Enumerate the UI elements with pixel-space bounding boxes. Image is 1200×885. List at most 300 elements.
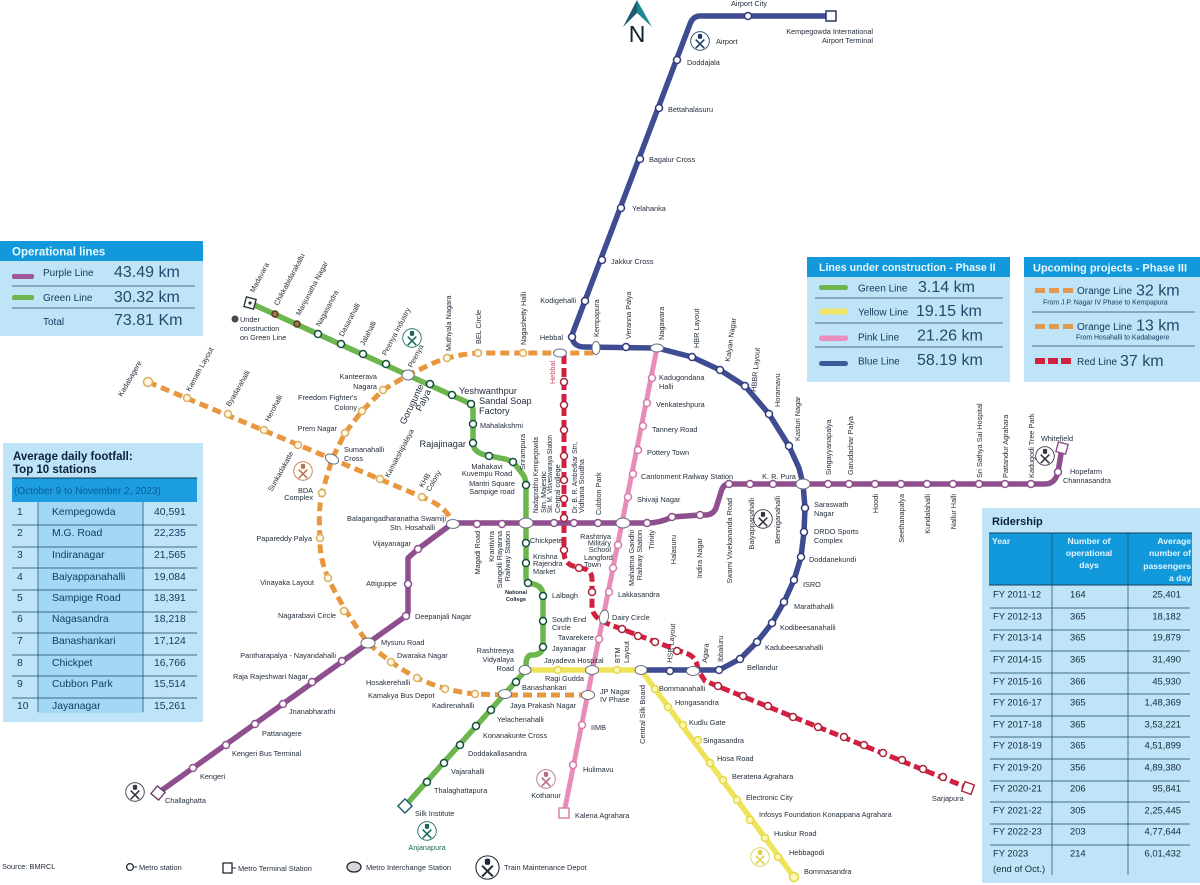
labels: blue line: Nagawara <box>657 306 666 340</box>
row: green line <box>12 289 180 306</box>
labels: blue line: Kodibeesanahalli <box>780 623 836 632</box>
labels: blue line: Doddanekundi <box>809 555 856 564</box>
row: blue line: 58.19 km <box>917 352 983 369</box>
labels: purple line: Halasuru <box>669 535 678 564</box>
line: purple <box>158 448 1062 793</box>
labels: blue line: Veranna Palya <box>624 291 633 339</box>
line: yellow <box>525 670 794 877</box>
labels: orange lines: Kamath Layout <box>184 346 216 393</box>
labels: blue line: ISRO <box>803 580 821 589</box>
labels: orange lines: Colony <box>334 403 357 412</box>
legend: train maintenance depot <box>476 856 587 879</box>
labels: pink line: JP Nagar <box>600 687 631 696</box>
labels: blue line: Saraswath <box>814 500 848 509</box>
labels: purple line: Stn. Hosahalli <box>390 523 435 532</box>
labels: blue line: Kempegowda International <box>786 27 873 36</box>
labels: pink line: Kothanur <box>531 791 561 800</box>
table: ridership by year: 366 <box>1070 676 1086 686</box>
labels: orange lines: Kadirenahalli <box>432 701 475 710</box>
row: green line: Green Line <box>43 293 93 304</box>
labels: yellow line <box>545 641 893 876</box>
table: ridership by year: 19,879 <box>1152 632 1181 642</box>
labels: purple line: Deepanjali Nagar <box>415 612 472 621</box>
labels: pink line: Town <box>584 560 601 569</box>
legend <box>127 856 587 879</box>
depot icon: Kothanur <box>537 770 555 788</box>
row: orange line 13 km: 13 km <box>1136 318 1180 334</box>
table: ridership by year: FY 2020-21 <box>993 782 1042 794</box>
table: top 10 stations: 15,261 <box>154 701 186 712</box>
stations: purple line <box>190 468 1062 772</box>
labels: yellow line: Central Silk Board <box>638 685 647 744</box>
labels: pink line: Pottery Town <box>647 448 689 457</box>
table: top 10 stations: Nagasandra <box>52 614 109 625</box>
labels: green line: Rajajinagar <box>420 439 466 449</box>
labels: purple line: Magadi Road <box>473 531 482 574</box>
labels: orange lines: Byadarahalli <box>224 368 252 408</box>
depot icon: Challaghatta <box>126 783 144 801</box>
table: ridership by year: 3,53,221 <box>1144 718 1181 730</box>
labels: blue line: K. R. Pura <box>762 472 797 481</box>
labels: red line: Hebbal <box>548 360 557 384</box>
labels: orange lines: Cross <box>344 454 363 463</box>
labels: green line: Madavara <box>248 260 271 294</box>
labels: green line: Vajarahalli <box>451 767 485 776</box>
labels: pink line: Cantonment Railway Station <box>641 472 733 481</box>
labels: purple line: Kengeri Bus Terminal <box>232 749 302 758</box>
labels: pink line: School <box>589 545 611 554</box>
labels: green line: Circle <box>552 623 571 632</box>
labels: pink line: Langford <box>584 553 613 562</box>
labels: green line: Sandal Soap <box>479 396 532 406</box>
labels: pink line: Kadugondana <box>659 373 705 382</box>
labels: blue line: Kalyan Nagar <box>723 317 738 362</box>
depot icon: BDA Complex <box>294 462 312 480</box>
labels: yellow line: Electronic City <box>746 793 793 802</box>
labels: green line: Market <box>533 567 555 576</box>
labels: orange lines: KHB <box>417 471 432 489</box>
table: top 10 stations: Banashankari <box>52 636 116 647</box>
table: top 10 stations: 8 <box>17 658 23 669</box>
note: under construction on green line: on Green Line <box>240 333 286 342</box>
table header: Year <box>992 536 1011 546</box>
row: purple line: 43.49 km <box>114 264 180 281</box>
row: pink line: 21.26 km <box>917 328 983 344</box>
labels: purple line: Railway Station <box>503 531 512 581</box>
table: ridership by year: 164 <box>1070 588 1086 600</box>
labels: purple line: Balagangadharanatha Swamiji <box>347 514 446 523</box>
labels: blue line: Bettahalasuru <box>668 105 713 114</box>
table header: a day <box>1169 573 1191 583</box>
labels: green line: Factory <box>479 406 510 416</box>
table: ridership by year: 365 <box>1070 696 1086 708</box>
labels: pink line: IIMB <box>591 723 606 732</box>
labels: purple line: Raja Rajeshwari Nagar <box>233 672 309 681</box>
north arrow: N <box>629 21 645 47</box>
labels: blue line: Kadubeesanahalli <box>765 643 823 652</box>
source note: Source: BMRCL <box>2 862 55 871</box>
labels: orange lines: Herohalli <box>263 393 284 423</box>
labels: blue line: Marathahalli <box>794 602 834 611</box>
depot icon: Airport <box>691 32 709 50</box>
panel: average daily footfall <box>3 443 203 722</box>
stations: blue line <box>568 12 808 674</box>
labels: pink line: Hulimavu <box>583 765 613 774</box>
labels: blue line <box>540 0 873 672</box>
labels: yellow line: Bommanahalli <box>659 684 706 693</box>
labels: purple line: Indira Nagar <box>695 537 704 578</box>
table: top 10 stations: 19,084 <box>154 572 186 583</box>
row: yellow line: 19.15 km <box>916 303 982 320</box>
depot icon: Whitefield <box>1036 447 1054 465</box>
heading: footfall title <box>13 451 133 476</box>
labels: green line: Sampige road <box>469 487 515 496</box>
panel: ridership <box>982 508 1200 883</box>
labels: green line: Jalahalli <box>358 319 378 347</box>
line: pink <box>564 348 657 813</box>
labels: blue line: Agara <box>700 642 711 663</box>
stations: orange lines <box>144 350 526 698</box>
table: ridership by year: FY 2014-15 <box>993 654 1042 664</box>
legend: train maintenance depot: Train Maintenance Depot <box>504 863 587 872</box>
table: top 10 stations: 5 <box>17 593 23 604</box>
stations: pink line <box>570 374 656 768</box>
labels: blue line: Yelahanka <box>632 204 667 213</box>
labels: orange lines: Sumanahalli <box>344 445 385 454</box>
labels: green line: Silk Institute <box>415 809 454 818</box>
labels: purple line <box>165 403 1112 805</box>
panel: operational lines <box>0 241 203 336</box>
labels: green line: Peenya <box>406 342 426 369</box>
labels: orange lines: Papareddy Palya <box>256 534 313 543</box>
labels: blue line: Airport <box>716 37 738 46</box>
labels: purple line: Railway Station <box>635 530 644 580</box>
table: top 10 stations: 3 <box>17 550 23 561</box>
table: top 10 stations: Chickpet <box>52 658 93 669</box>
row: purple line <box>12 264 180 281</box>
labels: pink line: Kalena Agrahara <box>575 811 630 820</box>
labels: pink line: Venkateshpura <box>656 400 706 409</box>
labels: pink line: Tavarekere <box>558 633 594 642</box>
table: ridership by year: 365 <box>1070 610 1086 622</box>
row: orange line 32 km: From J.P. Nagar IV Phase to Kempapura <box>1043 300 1168 306</box>
north arrow <box>623 0 652 47</box>
table: top 10 stations: 4 <box>17 572 23 583</box>
labels: green line: Yelachenahalli <box>497 715 544 724</box>
labels: blue line: HBBR Layout <box>749 347 762 392</box>
labels: yellow line: Infosys Foundation Konappana Agrahara <box>759 810 893 819</box>
row: green line: 30.32 km <box>114 289 180 306</box>
labels: green line: Palya <box>414 387 433 413</box>
labels: purple line: Hoodi <box>871 494 880 513</box>
row: orange line 13 km: Orange Line <box>1077 322 1132 333</box>
line: green <box>250 303 543 806</box>
labels: orange lines: Dwaraka Nagar <box>397 651 448 660</box>
table shading <box>38 502 143 713</box>
stations: green line <box>314 330 546 786</box>
table: ridership by year: FY 2013-14 <box>993 632 1042 642</box>
labels: blue line: Kodigehalli <box>540 296 576 305</box>
table header: passengers <box>1143 561 1191 571</box>
labels: purple line: Central college <box>553 464 562 513</box>
row: green line: Green Line <box>858 284 908 294</box>
table: ridership by year: 365 <box>1070 718 1086 730</box>
labels: orange lines: Kamakya Bus Depot <box>368 691 435 700</box>
row: orange line 32 km: Orange Line <box>1077 286 1132 297</box>
terminal stations <box>151 11 1068 818</box>
stations: red line <box>560 378 946 780</box>
labels: purple line: Baiyappanahalli <box>747 498 756 550</box>
labels: pink line: Rashtriya <box>580 532 612 541</box>
labels: green line: Krishna <box>533 552 559 561</box>
labels: purple line: Dr. B. R. Ambedkar Stn, <box>570 442 579 513</box>
labels: purple line: Stn. Majestic <box>539 471 548 513</box>
labels: orange lines: Nagashetty Halli <box>519 291 528 345</box>
labels: purple line: Vidhana Soudha <box>577 458 586 513</box>
table: ridership by year: 365 <box>1070 632 1086 642</box>
depot icon: Hebbagodi <box>751 848 769 866</box>
row: green line: 3.14 km <box>918 279 975 296</box>
labels: purple line: Kadugodi Tree Park <box>1027 413 1036 478</box>
labels: green line: South End <box>552 615 586 624</box>
labels: green line: Manjunatha Nagar <box>294 259 330 317</box>
labels: pink line: Tannery Road <box>652 425 697 434</box>
labels: orange lines: Freedom Fighter's <box>298 393 357 402</box>
labels: purple line: Kengeri <box>200 772 226 781</box>
table: top 10 stations: 2 <box>17 528 23 539</box>
row: total <box>43 312 182 329</box>
table header <box>989 533 1192 585</box>
labels: purple line: Kundalahalli <box>923 494 932 534</box>
table: ridership by year: 203 <box>1070 826 1086 836</box>
row: pink line: Pink Line <box>858 332 900 344</box>
date range band <box>12 478 197 502</box>
labels: green line: Banashankari <box>522 683 567 692</box>
table: ridership by year: (end of Oct.) <box>993 863 1045 874</box>
depot icon: Anjanapura <box>418 822 436 840</box>
labels: yellow line: Hebbagodi <box>789 848 825 857</box>
labels: orange lines: Muthyala Nagara <box>444 294 453 351</box>
labels: purple line: Pattanagere <box>262 729 302 738</box>
row: red line <box>1035 353 1164 370</box>
row: total: Total <box>43 317 64 328</box>
labels: green line: Srirampura <box>518 433 527 470</box>
labels: orange lines: Colony <box>424 469 443 493</box>
labels: purple line: Mysuru Road <box>381 638 424 647</box>
table: ridership by year: 206 <box>1070 782 1086 794</box>
labels: green line: Mahalakshmi <box>480 421 523 430</box>
table: ridership by year: FY 2017-18 <box>993 718 1042 730</box>
row: red line: 37 km <box>1120 353 1164 370</box>
labels: purple line: Jnanabharathi <box>289 707 336 716</box>
labels: green line: Thalaghattapura <box>434 786 488 795</box>
legend: metro station: Metro station <box>139 863 182 872</box>
table: ridership by year: 95,841 <box>1152 782 1181 794</box>
row: pink line <box>819 328 983 344</box>
labels: purple line: Sri Sathya Sai Hospital <box>975 403 984 478</box>
labels: blue line: Jakkur Cross <box>611 257 654 266</box>
table: ridership by year: 45,930 <box>1152 676 1181 686</box>
labels: purple line: Mahatma Gandhi <box>627 530 636 586</box>
table: ridership by year: FY 2011-12 <box>993 588 1041 600</box>
table: ridership by year: FY 2019-20 <box>993 762 1042 772</box>
labels: orange lines: Nagarabavi Circle <box>278 611 336 620</box>
labels: purple line: Krantivira <box>487 530 496 562</box>
labels: orange lines: Nagara <box>353 382 378 391</box>
table: ridership by year: 6,01,432 <box>1144 848 1181 858</box>
table: top 10 stations: 7 <box>17 636 23 647</box>
table: ridership by year: 2,25,445 <box>1144 804 1181 816</box>
labels: yellow line: Kudlu Gate <box>689 718 726 727</box>
row: blue line <box>819 352 983 369</box>
table: top 10 stations: 22,235 <box>154 528 186 539</box>
labels: blue line: DRDO Sports <box>814 527 859 536</box>
labels: purple line: Cubbon Park <box>594 472 603 515</box>
labels: orange lines: Kadabagere <box>116 359 144 398</box>
depot icon: Peenya <box>403 329 421 347</box>
row: total: 73.81 Km <box>114 312 182 329</box>
stations: yellow line <box>554 666 798 882</box>
stations: green line under construction <box>272 311 300 327</box>
row: red line: Red Line <box>1077 357 1117 368</box>
labels: green line: Peenya Industry <box>380 306 413 357</box>
labels: yellow line: Ragi Gudda <box>545 674 585 683</box>
table: ridership by year: 365 <box>1070 740 1086 750</box>
labels: pink line: Halli <box>659 382 674 391</box>
line: red (dashed) <box>564 355 968 788</box>
labels: orange lines: Complex <box>284 493 313 502</box>
labels: green line: Kuvempu Road <box>462 469 512 478</box>
labels: orange lines: BDA <box>298 486 313 495</box>
labels: purple line: Pantharapalya - Nayandahalli <box>240 651 336 660</box>
labels: pink line: Lakkasandra <box>618 590 661 599</box>
labels: green line: Konanakunte Cross <box>483 731 547 740</box>
table: top 10 stations: 18,218 <box>154 614 186 625</box>
labels: orange lines: Vinayaka Layout <box>260 578 314 587</box>
labels: pink line: Dairy Circle <box>612 613 650 622</box>
table: ridership by year: 18,182 <box>1152 610 1181 622</box>
table: top 10 stations: 6 <box>17 614 23 625</box>
table header: number of <box>1149 548 1191 558</box>
table: ridership by year: FY 2021-22 <box>993 804 1042 816</box>
table: top 10 stations: 1 <box>17 507 23 518</box>
heading: ridership: Ridership <box>992 516 1043 528</box>
note: under construction on green line: construction <box>240 324 279 333</box>
labels: purple line: Pattandur Agrahara <box>1001 414 1010 478</box>
table: top 10 stations: 10 <box>17 701 29 712</box>
labels: orange lines: Hosakerehalli <box>366 678 411 687</box>
labels: orange lines: BEL Circle <box>474 310 483 344</box>
labels: green line: College <box>506 597 526 603</box>
heading: footfall title: Top 10 stations <box>13 464 96 476</box>
table header: Average <box>1157 536 1191 546</box>
table: ridership by year: 365 <box>1070 654 1086 664</box>
labels: blue line: Complex <box>814 536 843 545</box>
row: orange line 32 km: 32 km <box>1136 282 1180 300</box>
labels: green line: Chickpete <box>530 536 562 545</box>
labels: orange lines: Sunkadakatte <box>266 450 295 493</box>
labels: blue line: Kempapura <box>592 298 601 337</box>
row: orange line 32 km <box>1035 282 1180 306</box>
table: top 10 stations: 18,391 <box>154 593 186 604</box>
labels: purple line: Nadaprabhu Kempegowda <box>531 436 540 513</box>
labels: purple line: Seethanapalya <box>897 493 906 543</box>
labels: orange lines: Kanteerava <box>340 372 378 381</box>
table: ridership by year: 4,51,899 <box>1144 740 1181 750</box>
panel: upcoming projects phase III <box>1024 257 1200 382</box>
labels: purple line: Swami Vivekananda Road <box>725 498 734 583</box>
legend: interchange station: Metro Interchange Station <box>366 863 451 872</box>
table: ridership by year: 25,401 <box>1152 588 1181 600</box>
labels: yellow line: Hosa Road <box>717 754 754 763</box>
labels: green line: Anjanapura <box>408 843 447 852</box>
row: orange line 13 km <box>1035 318 1180 342</box>
labels: pink line: Jayadeva Hospital <box>544 656 604 665</box>
labels: red line <box>548 360 965 803</box>
labels: green line: Yeshwanthpur <box>459 386 517 396</box>
labels: purple line: Vijayanagar <box>373 539 412 548</box>
table: top 10 stations: M.G. Road <box>52 528 102 539</box>
labels: orange lines: Kamakshipalaya <box>383 427 416 479</box>
table: top 10 stations: Indiranagar <box>52 550 105 561</box>
table: top 10 stations: 17,124 <box>154 636 186 647</box>
table: ridership by year: 1,48,369 <box>1144 696 1181 708</box>
interchange stations <box>324 342 810 700</box>
labels: green line: Doddakallasandra <box>468 749 528 758</box>
labels: blue line: Airport Terminal <box>822 36 873 45</box>
line: blue <box>572 16 831 670</box>
labels: green line: Jaya Prakash Nagar <box>510 701 577 710</box>
labels: green line: Chikkabidarakallu <box>272 252 307 307</box>
table: ridership by year: 214 <box>1070 848 1086 858</box>
table: top 10 stations: Jayanagar <box>52 701 101 712</box>
note: under construction on green line: Under <box>240 315 260 324</box>
table: ridership by year: 31,490 <box>1152 654 1181 664</box>
row: green line <box>819 279 975 296</box>
table: ridership by year: FY 2016-17 <box>993 696 1042 708</box>
heading: upcoming projects: Upcoming projects - Phase III <box>1033 262 1187 274</box>
row: yellow line <box>819 303 982 320</box>
labels: blue line: Nagar <box>814 509 834 518</box>
labels: green line: National <box>505 590 527 596</box>
note: under construction on green line <box>232 315 286 342</box>
labels: purple line: Garudachar Palya <box>846 415 855 475</box>
row: orange line 13 km: From Hosahalli to Kadabagere <box>1076 334 1170 342</box>
labels: pink line: Shivaji Nagar <box>637 495 681 504</box>
labels: red line: Sarjapura <box>932 794 965 803</box>
table header: Number of <box>1068 536 1111 546</box>
labels: yellow line: Singasandra <box>703 736 745 745</box>
labels: orange lines <box>116 291 528 710</box>
labels: purple line: Whitefield <box>1041 434 1073 443</box>
labels: yellow line: BTM <box>613 648 622 663</box>
labels: blue line: HSR Layout <box>665 623 677 663</box>
labels: green line: Road <box>497 664 514 673</box>
labels: blue line: Hebbal <box>540 333 563 342</box>
labels: yellow line: Layout <box>622 641 631 663</box>
date range band: (October 9 to November 2, 2023) <box>14 486 161 497</box>
heading: lines under construction: Lines under construction - Phase II <box>819 262 996 274</box>
table header: days <box>1079 560 1099 570</box>
table: top 10 stations: 16,766 <box>154 658 186 669</box>
table: ridership by year: FY 2015-16 <box>993 676 1042 686</box>
table: top 10 stations: 40,591 <box>154 507 186 518</box>
labels: purple line: Hopefarm <box>1070 467 1102 476</box>
table: ridership by year: FY 2012-13 <box>993 610 1042 622</box>
panel: lines under construction phase II <box>807 257 1010 382</box>
table: top 10 stations: Kempegowda <box>52 507 116 518</box>
table: ridership by year: FY 2018-19 <box>993 740 1042 750</box>
